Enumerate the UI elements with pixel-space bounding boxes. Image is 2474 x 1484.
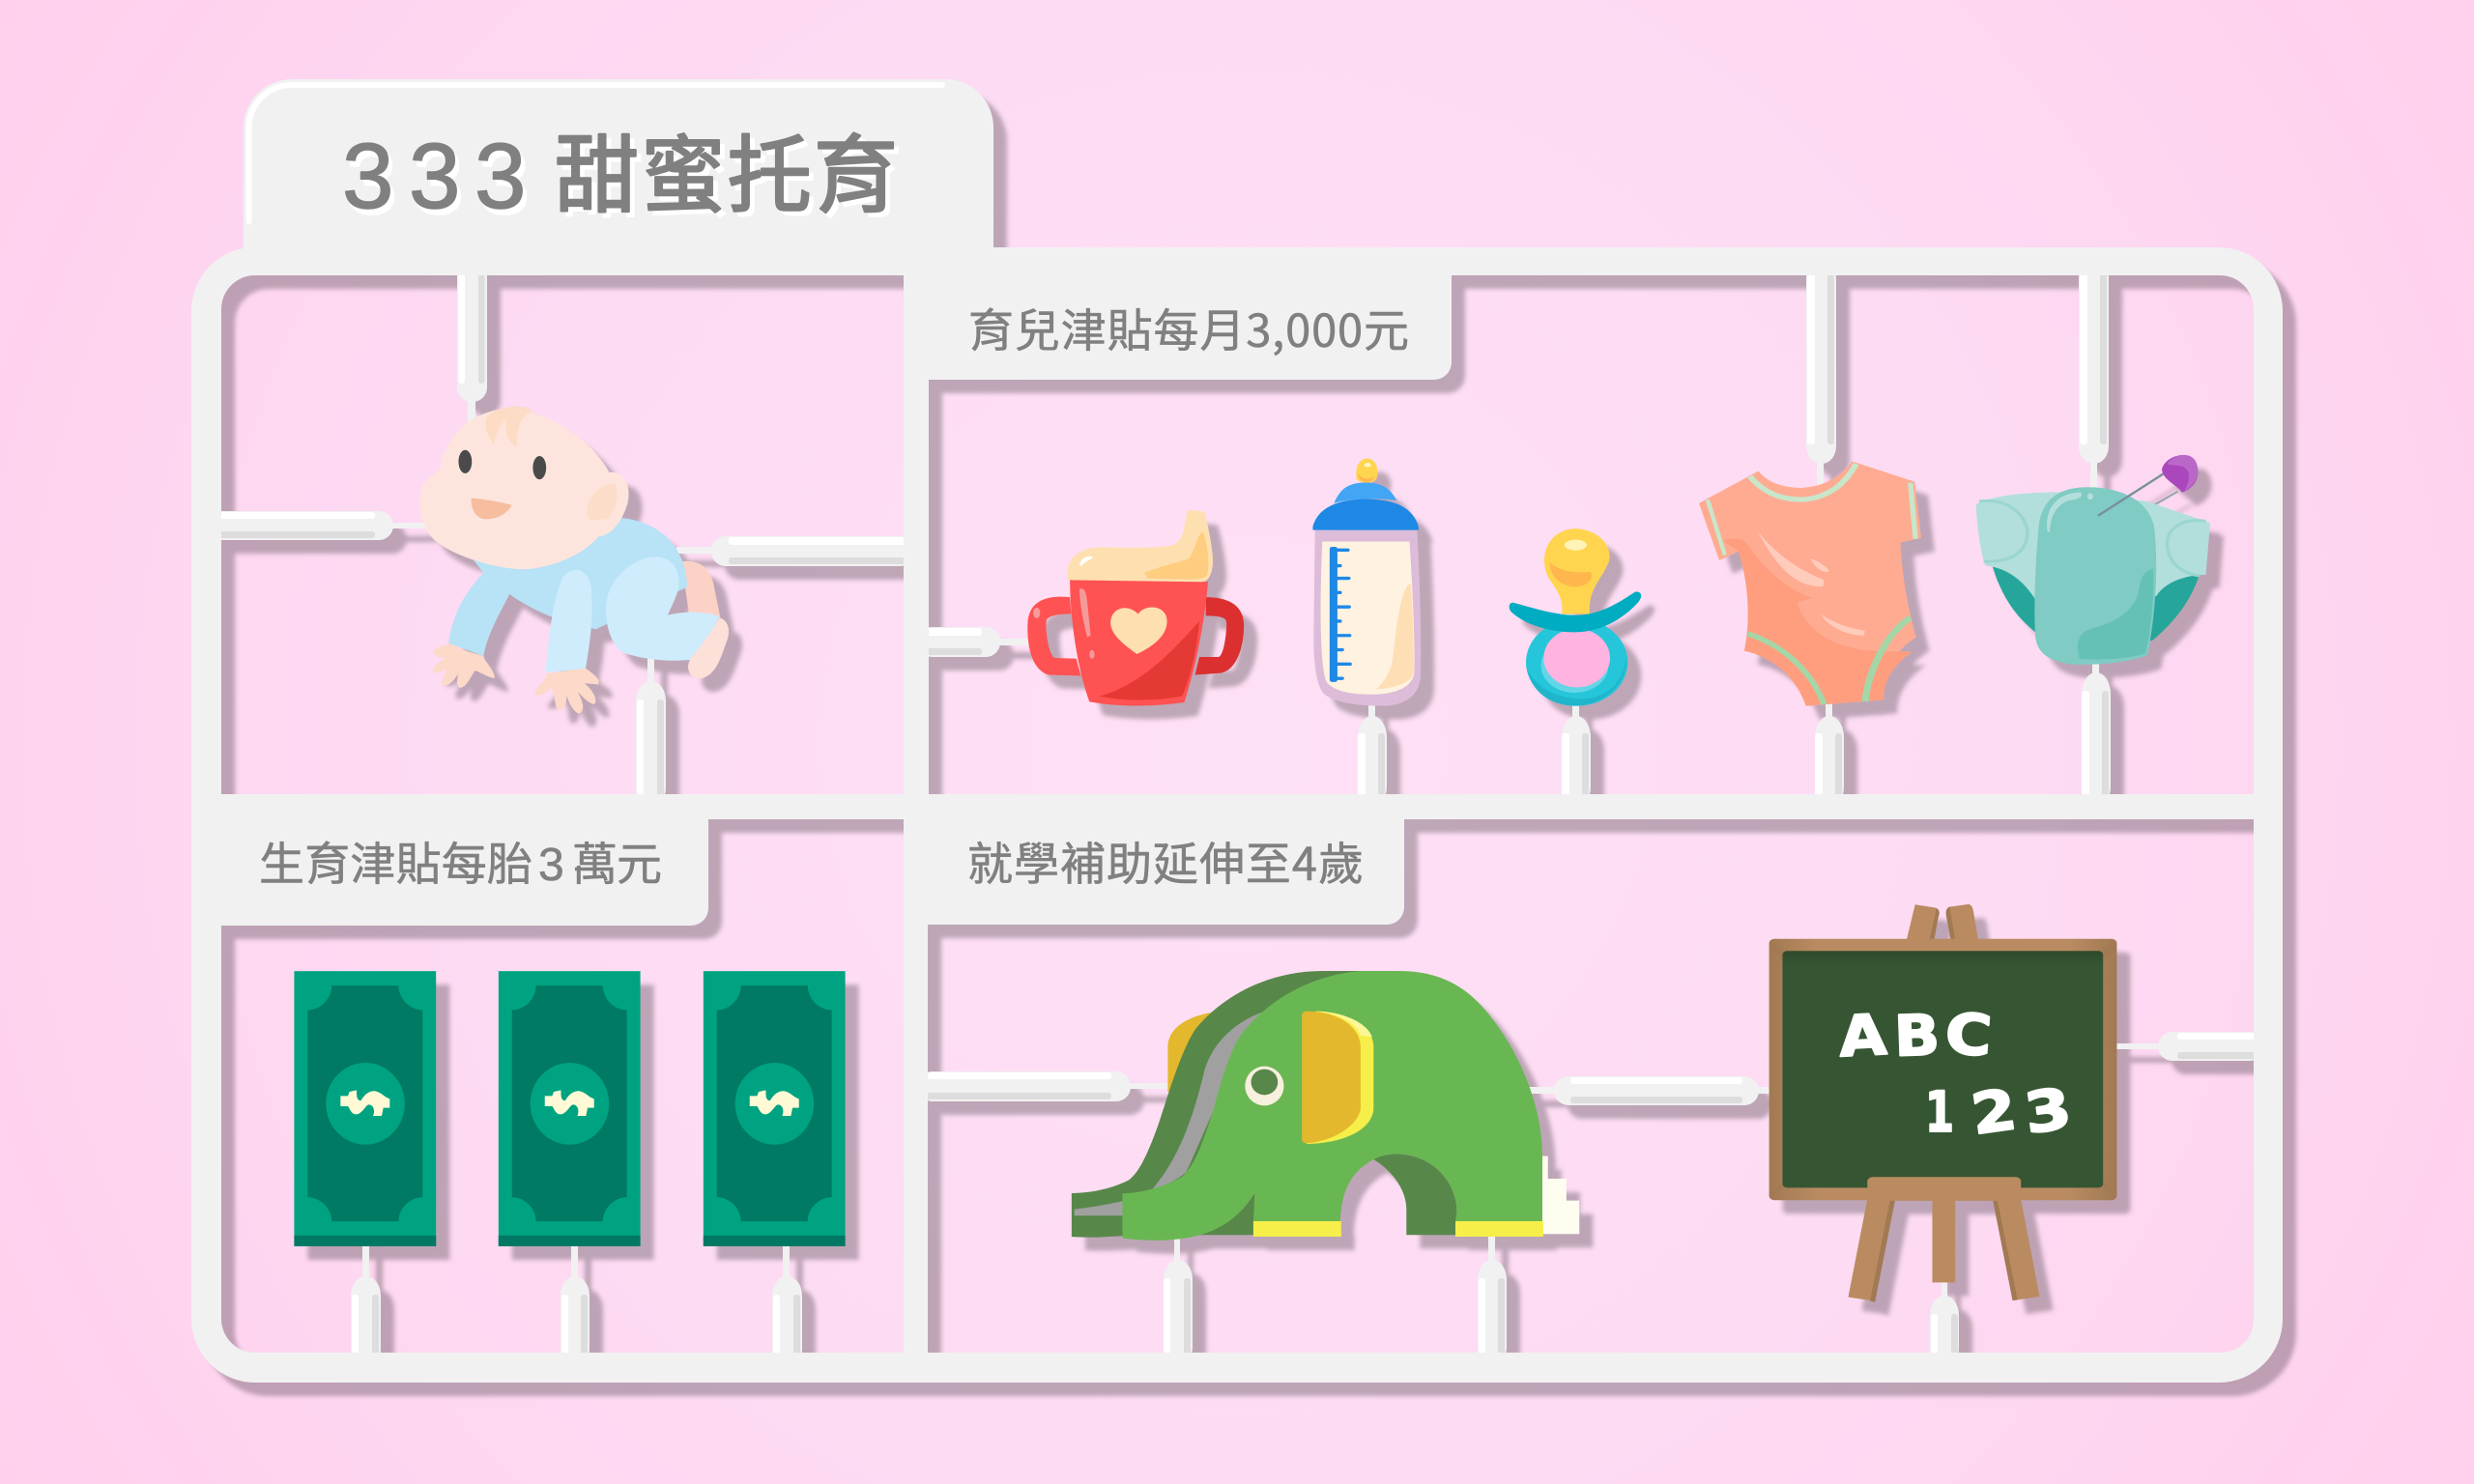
runner: elephant to board [1527, 1076, 1773, 1105]
runner: onesie bottom [1815, 698, 1844, 808]
title: 333 甜蜜托育 (shadow): 3 [413, 130, 464, 234]
runner: elephant bottom left [1164, 1237, 1193, 1366]
runner: bill 2 bottom [561, 1241, 590, 1368]
title: 333 甜蜜托育: 甜蜜托育 [555, 108, 898, 230]
label: 生育津貼每胎3萬元: 3 [538, 840, 564, 891]
runner: elephant left [918, 1071, 1174, 1101]
label: 生育津貼每胎3萬元: 生育津貼每胎 [259, 827, 532, 894]
runner: diaper top [2079, 261, 2109, 493]
runner: onesie top [1806, 261, 1836, 488]
icon: crawling baby [419, 407, 729, 714]
title: 333 甜蜜托育 (shadow): 3 [478, 130, 530, 234]
runner: bottle bottom [1358, 691, 1387, 808]
model kit sprue with parts [191, 79, 2283, 1383]
runner: baby left [208, 511, 430, 540]
board text: 123: 3 [2020, 1075, 2075, 1147]
runner: bill 1 bottom [351, 1241, 381, 1368]
icon: baby bottle [1312, 459, 1421, 706]
icon: elephant slide [1072, 971, 1579, 1241]
board text: 123: 1 [1925, 1079, 1954, 1145]
runner: baby top [457, 261, 487, 425]
icon: banknote 1 [294, 971, 436, 1246]
icon: cloth diaper with pin [1976, 455, 2210, 665]
runner: diaper bottom [2082, 662, 2111, 808]
label: 生育津貼每胎3萬元 [259, 827, 662, 894]
board text: ABC [1837, 1000, 1994, 1070]
plastic frame with title tab [191, 79, 2283, 1383]
runner: baby right [676, 536, 914, 566]
runner: board bottom [1930, 1277, 1959, 1368]
board text: ABC: A [1837, 1002, 1888, 1070]
runner: pacifier bottom [1562, 700, 1591, 808]
title: 333 甜蜜托育: 3 [409, 125, 460, 228]
icon: blackboard on easel [1769, 904, 2116, 1302]
runner: board right [2112, 1032, 2264, 1061]
icon: baby onesie [1699, 462, 1921, 706]
label: 育兒津貼每月3,000元: 育兒津貼每月3,000元 [968, 294, 1409, 360]
icon: banknote 3 [704, 971, 846, 1246]
title: 333 甜蜜托育 (shadow): 3 [346, 130, 397, 234]
runner: bill 3 bottom [772, 1241, 802, 1368]
runner: baby bottom [636, 657, 666, 807]
board text: ABC: C [1943, 1000, 1994, 1070]
icon: pacifier [1510, 528, 1641, 706]
title highlight stroke [249, 85, 942, 221]
title: 333 甜蜜托育 [342, 108, 898, 230]
title: 333 甜蜜托育 (shadow) [346, 113, 903, 235]
board text: 123 [1925, 1075, 2075, 1148]
label: 就學補助延伸至4歲: 就學補助延伸至4歲 [967, 827, 1364, 894]
title: 333 甜蜜托育: 3 [342, 125, 393, 228]
runner: elephant bottom right [1478, 1235, 1507, 1366]
title: 333 甜蜜托育 (shadow): 甜蜜托育 [560, 113, 903, 235]
title: 333 甜蜜托育: 3 [475, 125, 526, 228]
runner: cup left [918, 627, 1034, 657]
board text: 123: 2 [1968, 1076, 2021, 1148]
icon: banknote 2 [499, 971, 641, 1246]
label: 生育津貼每胎3萬元: 萬元 [572, 827, 662, 894]
board text: ABC: B [1893, 1002, 1941, 1070]
icon: sippy cup [1027, 510, 1244, 705]
